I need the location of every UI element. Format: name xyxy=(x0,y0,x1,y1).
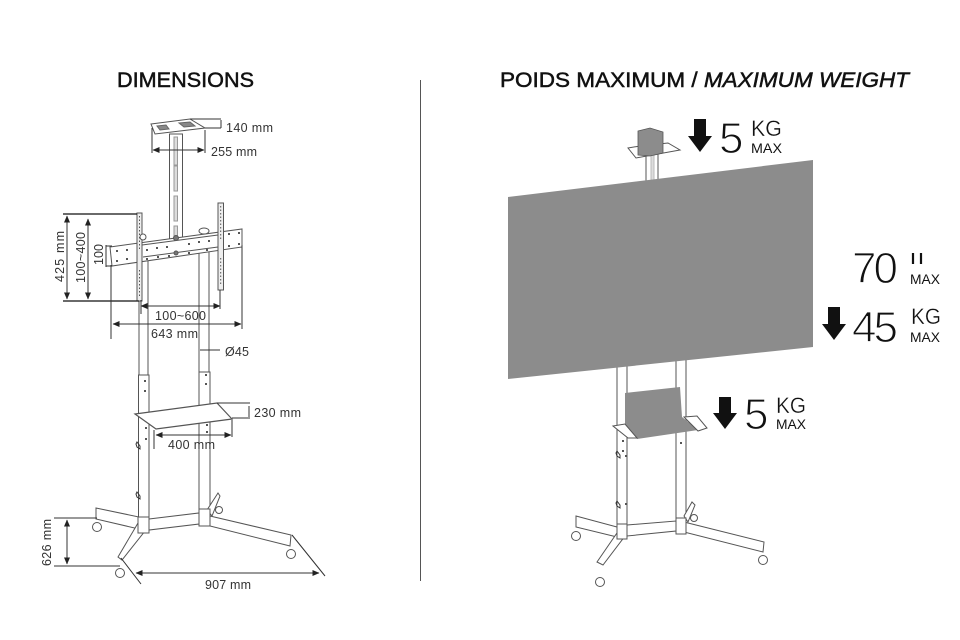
arrow down xyxy=(713,397,737,429)
top load label xyxy=(688,114,782,163)
screen size label: MAX xyxy=(910,272,940,287)
screen load label xyxy=(822,303,941,352)
dimension labels: 100~400 xyxy=(74,232,88,283)
screen size label: 70 xyxy=(852,244,898,293)
arrow down xyxy=(688,119,712,152)
dimension labels: 400 mm xyxy=(168,438,215,452)
lower poles xyxy=(617,350,686,530)
screen size label xyxy=(852,244,940,293)
diagram: stand with maximum weights xyxy=(508,128,813,586)
shelf load label: MAX xyxy=(776,417,806,432)
dimension labels: 907 mm xyxy=(205,578,251,592)
dimension labels: Ø45 xyxy=(225,345,249,359)
title: maximum weight: POIDS MAXIMUM / MAXIMUM WEIGHT xyxy=(500,68,911,92)
dimension lines xyxy=(54,119,325,584)
shelf xyxy=(135,403,232,429)
shelf load label: KG xyxy=(776,393,806,418)
dimension labels: 100 xyxy=(92,244,106,265)
screen xyxy=(508,160,813,379)
dimension labels: 425 mm xyxy=(53,231,67,282)
dimension labels: 140 mm xyxy=(226,121,273,135)
top plate xyxy=(628,143,680,158)
dimension labels: 255 mm xyxy=(211,145,257,159)
dimension labels: 626 mm xyxy=(40,519,54,566)
pole hooks and holes xyxy=(616,440,682,508)
dimension labels xyxy=(40,121,301,592)
dimension labels: 100~600 xyxy=(155,309,206,323)
title: dimensions: DIMENSIONS xyxy=(117,68,254,92)
shelf load label: 5 xyxy=(744,390,768,439)
pole holes and hooks xyxy=(136,374,208,499)
diagram: stand with dimensions xyxy=(40,119,325,592)
dimension labels: 643 mm xyxy=(151,327,198,341)
top load label: 5 xyxy=(719,114,743,163)
divider xyxy=(420,80,422,581)
shelf load label xyxy=(713,390,806,439)
arrow down xyxy=(822,307,846,340)
stand poles xyxy=(138,240,210,525)
wall mount bar and brackets xyxy=(110,203,242,301)
top load label: KG xyxy=(751,116,782,141)
screen load label: 45 xyxy=(852,303,898,352)
base with casters xyxy=(572,502,768,586)
screen load label: MAX xyxy=(910,330,940,345)
top column xyxy=(646,152,658,182)
dimension labels: 230 mm xyxy=(254,406,301,420)
shelf load xyxy=(625,387,698,439)
top load label: MAX xyxy=(751,141,782,156)
base with casters xyxy=(92,493,296,578)
shelf tabs xyxy=(613,424,637,438)
screen load label: KG xyxy=(911,304,941,329)
top plate and column xyxy=(151,119,205,242)
top load box xyxy=(638,128,663,156)
